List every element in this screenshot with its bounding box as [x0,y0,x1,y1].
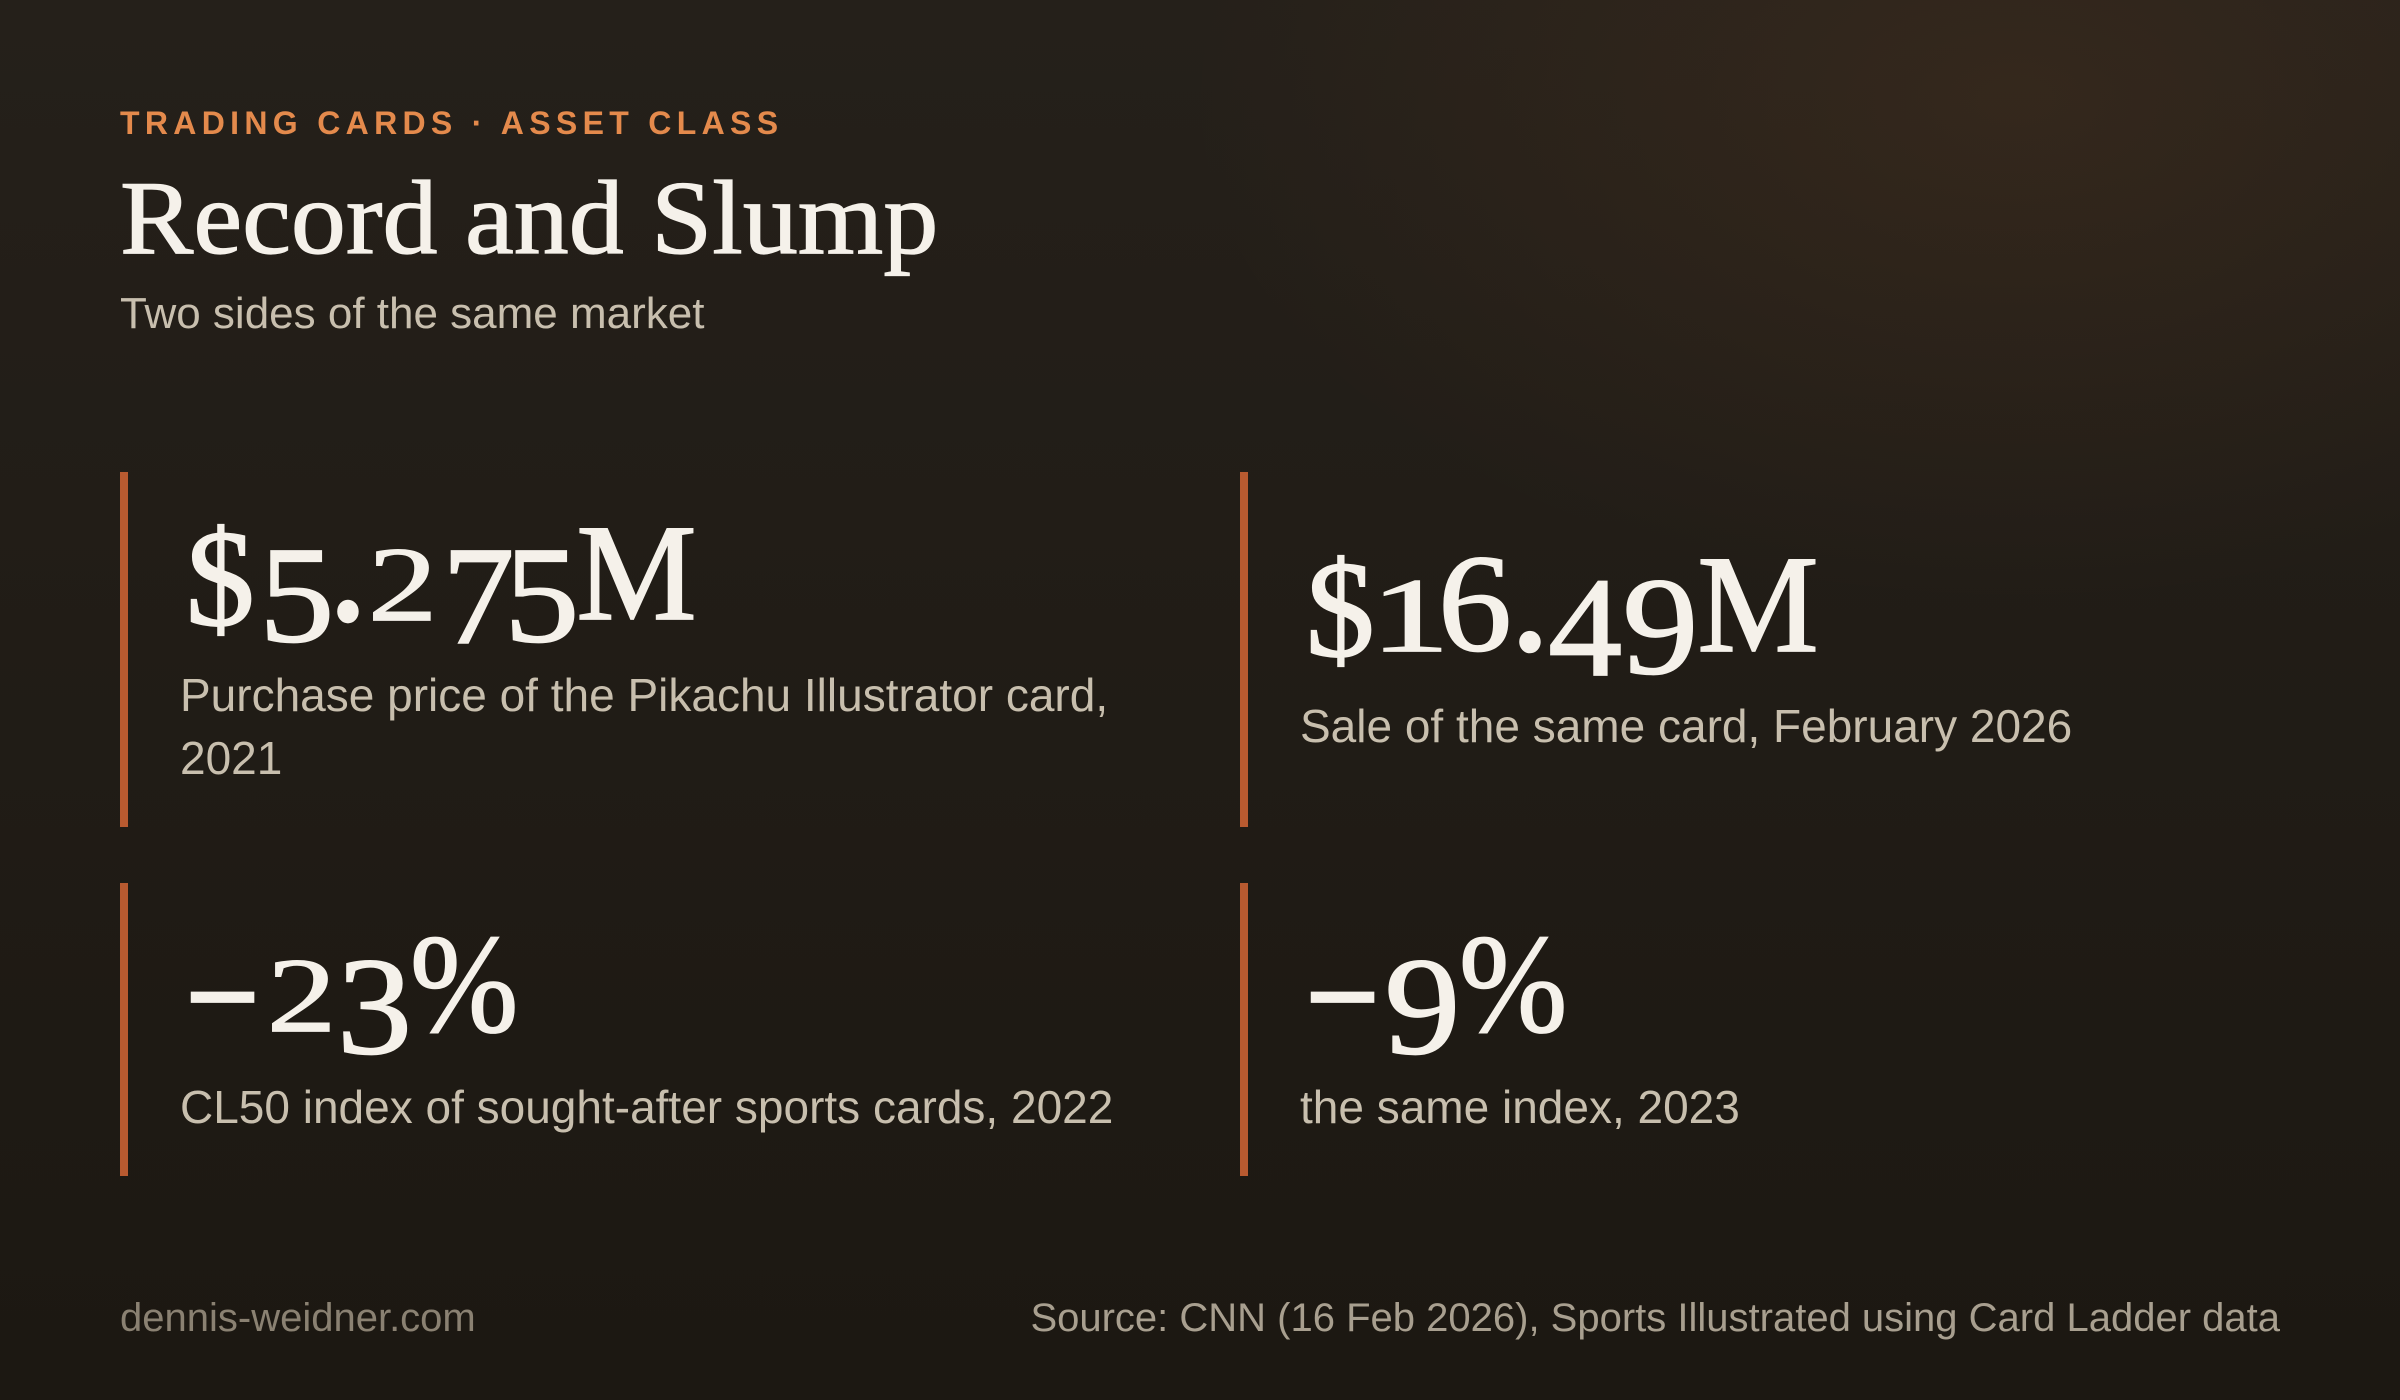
big number: $5.275M: 7 [442,518,514,674]
footer: site credit: dennis-weidner.com [120,1296,476,1340]
panel: CL50 index 2022 [120,883,1113,1176]
subtitle: Two sides of the same market [120,288,704,338]
accent bar [1240,472,1248,827]
big number: −23%: − [185,897,260,1097]
big number: $5.275M: 5 [504,519,579,671]
big number: −9%: % [1459,906,1567,1062]
big number: −23%: 3 [337,929,412,1084]
big number: −9%: 9 [1384,929,1460,1084]
big number: −9%: − [1305,897,1380,1097]
panel: sale 2026 [1240,472,2072,827]
accent bar [120,883,128,1176]
big number: $5.275M: 2 [368,525,437,644]
eyebrow: TRADING CARDS · ASSET CLASS [120,105,783,141]
big number: $16.49M: 9 [1622,549,1698,704]
big number: $16.49M: 4 [1548,549,1622,706]
label: Sale of the same card, February 2026 [1300,700,2072,752]
label: the same index, 2023 [1300,1081,1740,1133]
panel: purchase price 2021 [120,459,1108,827]
big number: $16.49M [1306,498,1819,706]
big number: $16.49M: . [1510,498,1550,687]
accent bar [120,472,128,827]
big number: $16.49M: 6 [1438,526,1512,681]
title: Record and Slump [120,159,938,276]
big number: −23%: % [410,906,518,1062]
footer: source: Source: CNN (16 Feb 2026), Sports Illustrated using Card Ladder data [1030,1296,2280,1340]
label: CL50 index of sought-after sports cards, 2022 [180,1081,1113,1133]
big number: $16.49M: $ [1306,533,1375,686]
big number: −23%: 2 [267,936,336,1055]
accent bar [1240,883,1248,1176]
big number: $5.275M: $ [186,502,255,655]
big number: $16.49M: 1 [1370,556,1450,675]
big number: $5.275M: M [576,497,697,649]
big number: $5.275M: . [328,459,368,659]
label: Purchase price of the Pikachu Illustrator card, 2021 [180,669,1108,784]
big number: $5.275M [186,459,697,674]
big number: $16.49M: M [1697,527,1819,682]
big number: $5.275M: 5 [259,519,334,671]
big number: −9% [1305,897,1567,1097]
big number: −23% [185,897,518,1097]
panel: CL50 index 2023 [1240,883,1740,1176]
